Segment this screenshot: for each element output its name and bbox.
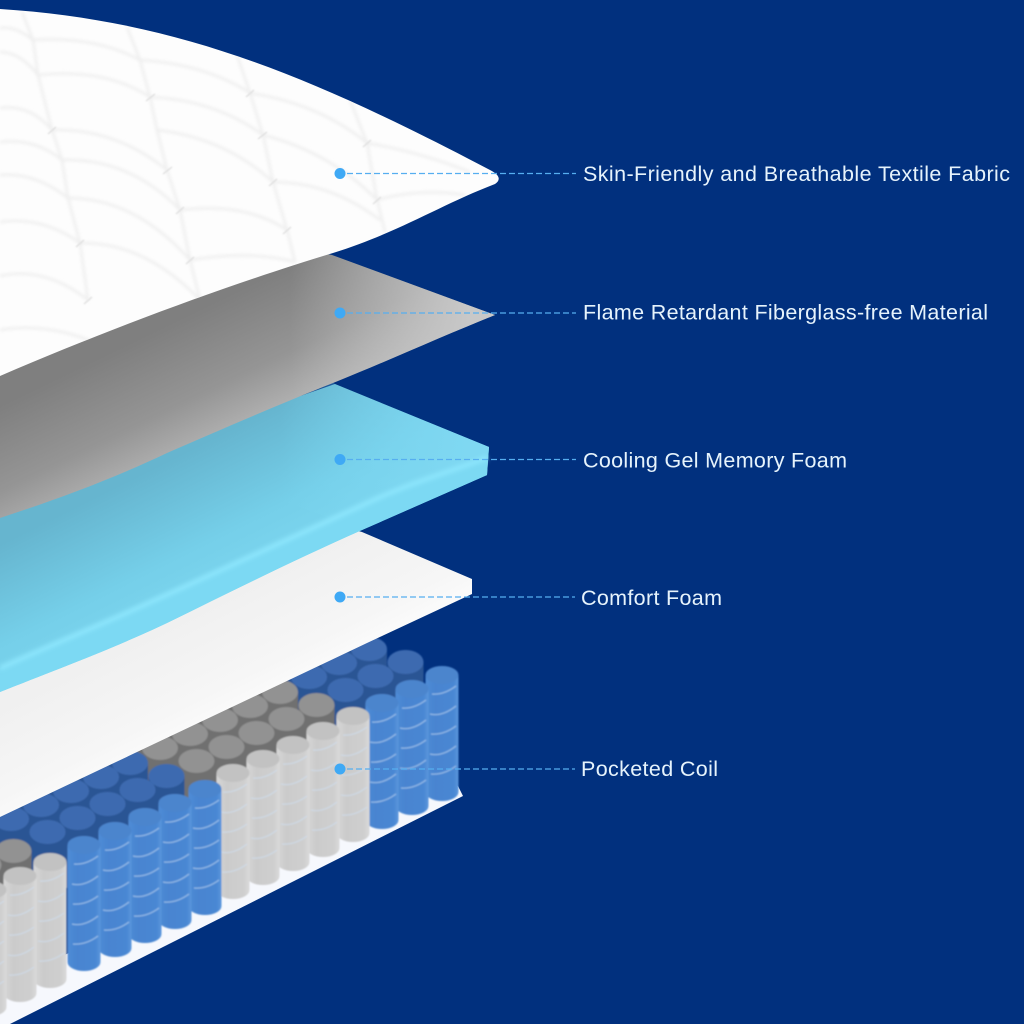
front row of coils xyxy=(0,666,458,1016)
quilting seams xyxy=(0,12,470,345)
callout: comfort foam xyxy=(334,586,722,610)
callout: cooling gel memory foam: Cooling Gel Memory Foam xyxy=(583,448,847,472)
callout: textile fabric: Skin-Friendly and Breathable Textile Fabric xyxy=(583,162,1010,186)
cooling gel memory foam layer xyxy=(0,350,489,692)
callout: textile fabric xyxy=(334,162,1010,186)
comfort foam layer xyxy=(0,500,472,817)
pocketed coil unit xyxy=(0,624,458,1016)
callout: flame retardant material: Flame Retardant Fiberglass-free Material xyxy=(583,300,988,324)
seam ticks xyxy=(48,90,381,304)
callout: pocketed coil: Pocketed Coil xyxy=(581,757,718,781)
callout: flame retardant material xyxy=(334,300,988,324)
quilted textile fabric layer xyxy=(0,9,499,376)
callout: pocketed coil xyxy=(334,757,718,781)
callout: cooling gel memory foam xyxy=(334,448,847,472)
back rows of coil caps xyxy=(0,624,424,935)
callout: comfort foam: Comfort Foam xyxy=(581,586,722,610)
base board of the coil unit xyxy=(0,778,463,1024)
flame retardant gray layer xyxy=(0,240,495,518)
